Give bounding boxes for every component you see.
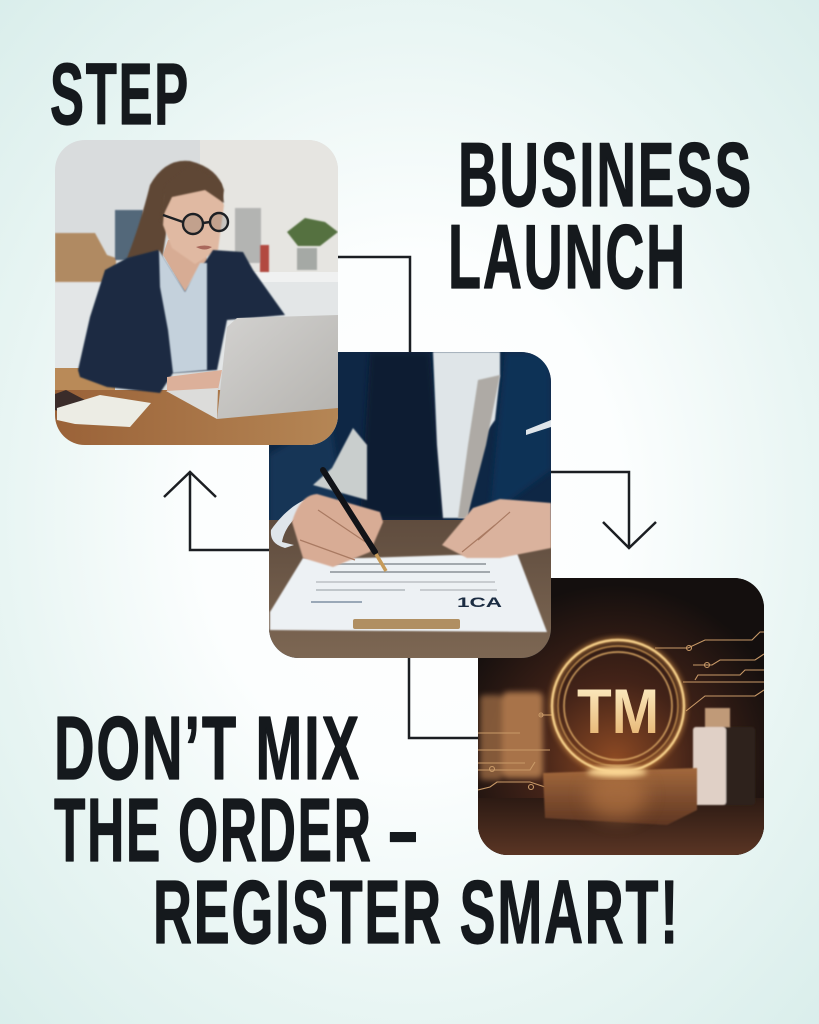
cabinet top bbox=[55, 272, 338, 282]
table bbox=[55, 390, 338, 445]
hair back bbox=[127, 161, 224, 260]
plinth front light bbox=[587, 771, 647, 819]
arrow: connector photo 1 to photo 2 bbox=[338, 257, 410, 352]
right hand bbox=[442, 499, 551, 558]
sleeve stripe bbox=[526, 420, 551, 435]
wall bbox=[55, 140, 338, 445]
neck bbox=[163, 240, 207, 292]
clipboard clip bbox=[353, 619, 460, 629]
glowing ring bbox=[552, 640, 684, 772]
blurred bottles bbox=[480, 692, 543, 780]
ICA label: 1CA bbox=[457, 594, 502, 610]
heading: don't mix the order - register smart: DON’T MIX bbox=[54, 699, 361, 799]
left hand bbox=[292, 494, 383, 567]
finger lines bbox=[300, 510, 510, 560]
white bottle bbox=[693, 708, 755, 805]
blazer bbox=[78, 250, 285, 393]
hair fringe bbox=[162, 182, 225, 217]
heading: step: STEP bbox=[50, 46, 190, 143]
glasses bbox=[163, 213, 228, 234]
base glow bbox=[587, 767, 647, 777]
circuit lines bbox=[478, 632, 764, 790]
face bbox=[163, 187, 224, 264]
heading: don't mix the order - register smart bbox=[54, 699, 680, 963]
panel: woman at laptop photo bbox=[55, 140, 338, 445]
lips bbox=[196, 246, 212, 250]
panel: signing document photo bbox=[269, 352, 551, 658]
cabinet bbox=[55, 282, 338, 372]
pen bbox=[323, 470, 386, 571]
heading: business launch bbox=[448, 125, 753, 308]
ring glow bbox=[552, 640, 684, 772]
book bbox=[55, 390, 151, 427]
arrow: photo 2 down to photo 3 bbox=[551, 472, 656, 548]
shirt shadow bbox=[458, 375, 500, 518]
arrow: photo 2 up to photo 1 bbox=[164, 472, 269, 550]
shirt bbox=[159, 250, 207, 373]
shelf clutter bbox=[55, 208, 317, 282]
right wall bbox=[200, 140, 338, 272]
jacket shading bbox=[269, 352, 551, 520]
plant bbox=[287, 218, 338, 246]
hand bbox=[167, 370, 222, 391]
plinth bbox=[543, 768, 697, 825]
arrow: connector photo 2 to photo 3 bbox=[409, 658, 478, 738]
laptop bbox=[166, 315, 338, 419]
paper bbox=[270, 553, 547, 632]
wooden table bbox=[269, 520, 551, 658]
panel: trademark photo bbox=[478, 578, 764, 855]
TM letters: TM bbox=[577, 677, 659, 747]
desk back bbox=[55, 368, 115, 390]
shirt bbox=[433, 352, 500, 518]
left cuff bbox=[270, 500, 306, 548]
heading: don't mix the order - register smart: THE ORDER – bbox=[54, 781, 419, 881]
background gap bbox=[313, 428, 367, 500]
table surface bbox=[478, 798, 764, 855]
document text lines bbox=[311, 564, 497, 602]
